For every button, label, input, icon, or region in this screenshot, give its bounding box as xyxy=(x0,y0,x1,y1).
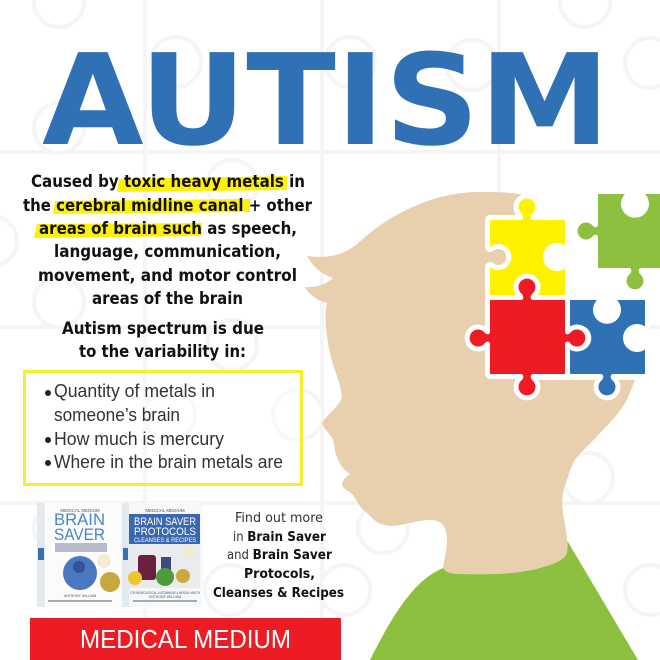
footer banner: Medical Medium: MEDICAL MEDIUM xyxy=(80,624,291,654)
illustration: child silhouette with puzzle pieces xyxy=(305,192,660,660)
text block: find out more: Cleanses & Recipes xyxy=(213,585,344,601)
title: AUTISM xyxy=(42,27,610,174)
book: Brain Saver: BRAIN xyxy=(54,510,105,529)
callout box: variability list: How much is mercury xyxy=(54,429,224,449)
subheading: autism spectrum: to the variability in: xyxy=(79,342,246,361)
text block: cause of autism with highlights xyxy=(23,172,313,308)
text block: cause of autism with highlights: the cerebral midline canal + other xyxy=(23,196,313,215)
callout box: variability list: Where in the brain metals are xyxy=(54,452,283,472)
book: Brain Saver Protocols: CLEANSES & RECIPES xyxy=(134,537,197,544)
text block: cause of autism with highlights: areas of the brain xyxy=(92,289,243,308)
text block: cause of autism with highlights: language, communication, xyxy=(54,242,281,261)
book: Brain Saver xyxy=(37,503,122,607)
footer banner: Medical Medium xyxy=(30,618,341,660)
text block: cause of autism with highlights: movement, and motor control xyxy=(38,266,297,285)
head silhouette xyxy=(305,192,635,574)
puzzle piece: blue xyxy=(570,300,645,395)
text block: find out more xyxy=(213,511,344,601)
subheading: autism spectrum: Autism spectrum is due xyxy=(62,319,264,338)
book: Brain Saver: MEDICAL MEDIUM xyxy=(60,508,100,513)
text block: find out more: Protocols, xyxy=(244,566,315,582)
callout box: variability list: someone’s brain xyxy=(54,405,180,425)
puzzle piece: red xyxy=(470,279,585,395)
book: Brain Saver Protocols: PROTOCOLS xyxy=(134,526,196,538)
subheading: autism spectrum xyxy=(62,319,264,361)
book: Brain Saver: SAVER xyxy=(54,525,105,544)
callout box: variability list: Quantity of metals in xyxy=(54,381,215,401)
text block: find out more: Find out more xyxy=(235,511,323,526)
book: Brain Saver Protocols: MEDICAL MEDIUM xyxy=(145,508,185,513)
puzzle piece: yellow xyxy=(490,199,565,295)
book: Brain Saver Protocols xyxy=(122,503,203,607)
puzzle piece: green xyxy=(578,194,660,289)
shirt xyxy=(370,542,638,660)
text block: cause of autism with highlights: Caused by toxic heavy metals in xyxy=(31,172,305,191)
book: Brain Saver Protocols: FOR NEUROLOGICAL, AUTOIMMUNE & MENTAL HEALTH xyxy=(130,591,200,595)
book: Brain Saver Protocols: BRAIN SAVER xyxy=(134,516,196,528)
text block: find out more: and Brain Saver xyxy=(227,547,332,563)
text block: find out more: in Brain Saver xyxy=(233,529,326,545)
book: Brain Saver Protocols: ANTHONY WILLIAM xyxy=(149,595,181,599)
text block: cause of autism with highlights: areas of brain such as speech, xyxy=(39,219,297,238)
callout box: variability list xyxy=(24,372,302,484)
book: Brain Saver: ANTHONY WILLIAM xyxy=(64,594,96,598)
